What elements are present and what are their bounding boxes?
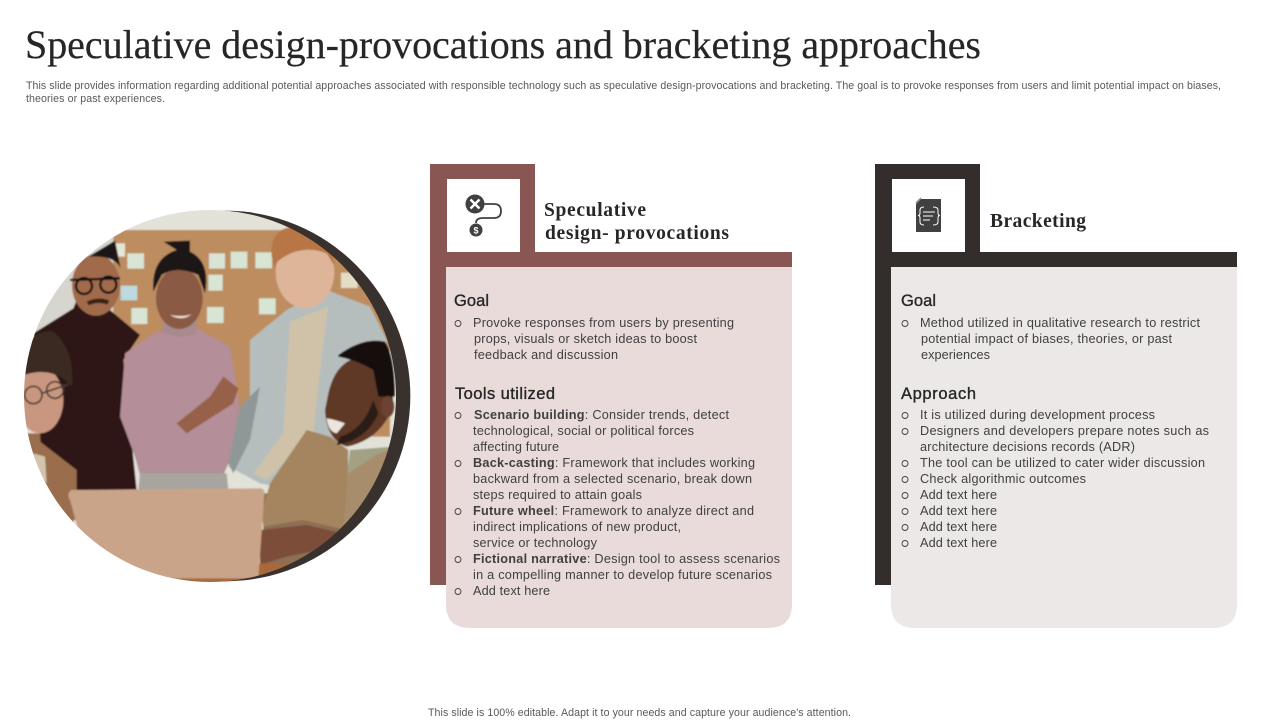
approach list bbox=[902, 408, 1209, 550]
goal text: feedback and discussion bbox=[474, 348, 618, 362]
team photo in circle bbox=[24, 210, 410, 582]
approach list: Designers and developers prepare notes such as bbox=[920, 424, 1209, 438]
footer note: This slide is 100% editable. Adapt it to your needs and capture your audience's attention. bbox=[428, 707, 851, 719]
table and laptop bbox=[169, 562, 291, 582]
approach list: It is utilized during development process bbox=[920, 408, 1155, 422]
goal text: props, visuals or sketch ideas to boost bbox=[474, 332, 697, 346]
icon: path from cross to dollar: $ bbox=[473, 226, 479, 236]
tools list bbox=[455, 408, 780, 598]
panel body bbox=[446, 267, 792, 628]
goal text bbox=[902, 316, 1200, 362]
approach list: Check algorithmic outcomes bbox=[920, 472, 1086, 486]
panel frame bbox=[875, 164, 1237, 585]
icon: document with brackets bbox=[892, 179, 965, 252]
panel body bbox=[891, 267, 1237, 628]
goal text bbox=[455, 316, 734, 362]
tools list: Future wheel: Framework to analyze direct and bbox=[473, 504, 754, 518]
tools list: in a compelling manner to develop future scenarios bbox=[473, 568, 772, 582]
description text bbox=[26, 80, 1221, 105]
icon: path from cross to dollar bbox=[447, 179, 520, 252]
tools list: indirect implications of new product, bbox=[473, 520, 681, 534]
tools list: technological, social or political forces bbox=[473, 424, 694, 438]
description text: theories or past experiences. bbox=[26, 93, 165, 105]
left woman bbox=[40, 442, 78, 521]
panel frame bbox=[430, 164, 792, 585]
goal text: potential impact of biases, theories, or past bbox=[921, 332, 1172, 346]
heading bbox=[544, 200, 729, 244]
tools list: backward from a selected scenario, break down bbox=[473, 472, 752, 486]
goal heading: Goal bbox=[901, 292, 936, 310]
heading: Bracketing bbox=[990, 211, 1086, 232]
approach list: The tool can be utilized to cater wider discussion bbox=[920, 456, 1205, 470]
approach list: Add text here bbox=[920, 520, 997, 534]
goal text: experiences bbox=[921, 348, 990, 362]
title: Speculative design-provocations and bracketing approaches bbox=[25, 22, 981, 67]
goal heading: Goal bbox=[454, 292, 489, 310]
approach list: architecture decisions records (ADR) bbox=[920, 440, 1135, 454]
description text: This slide provides information regarding additional potential approaches associated with responsible technology such as speculative design-provocations and bracketing. The goal is to provoke responses from users and limit potential impact on biases, bbox=[26, 80, 1221, 92]
tools list: affecting future bbox=[473, 440, 559, 454]
heading: design- provocations bbox=[545, 223, 729, 244]
heading: Speculative bbox=[544, 200, 646, 221]
tools list: Scenario building: Consider trends, detect bbox=[474, 408, 729, 422]
tools list: steps required to attain goals bbox=[473, 488, 642, 502]
man in turtleneck bbox=[33, 300, 140, 490]
man in grey jacket bbox=[228, 290, 387, 490]
goal text: Provoke responses from users by presenting bbox=[473, 316, 734, 330]
tools list: Back-casting: Framework that includes working bbox=[473, 456, 755, 470]
approach heading: Approach bbox=[901, 385, 976, 403]
approach list: Add text here bbox=[920, 488, 997, 502]
tools list: Add text here bbox=[473, 584, 550, 598]
tools list: Fictional narrative: Design tool to assess scenarios bbox=[473, 552, 780, 566]
goal text: Method utilized in qualitative research to restrict bbox=[920, 316, 1200, 330]
panel: speculative design-provocations bbox=[430, 164, 792, 628]
tools list: service or technology bbox=[473, 536, 598, 550]
woman in pink bbox=[120, 328, 242, 475]
approach list: Add text here bbox=[920, 536, 997, 550]
panel: bracketing bbox=[875, 164, 1237, 628]
approach list: Add text here bbox=[920, 504, 997, 518]
tools heading: Tools utilized bbox=[455, 385, 555, 403]
man in tan blazer bbox=[347, 446, 389, 480]
